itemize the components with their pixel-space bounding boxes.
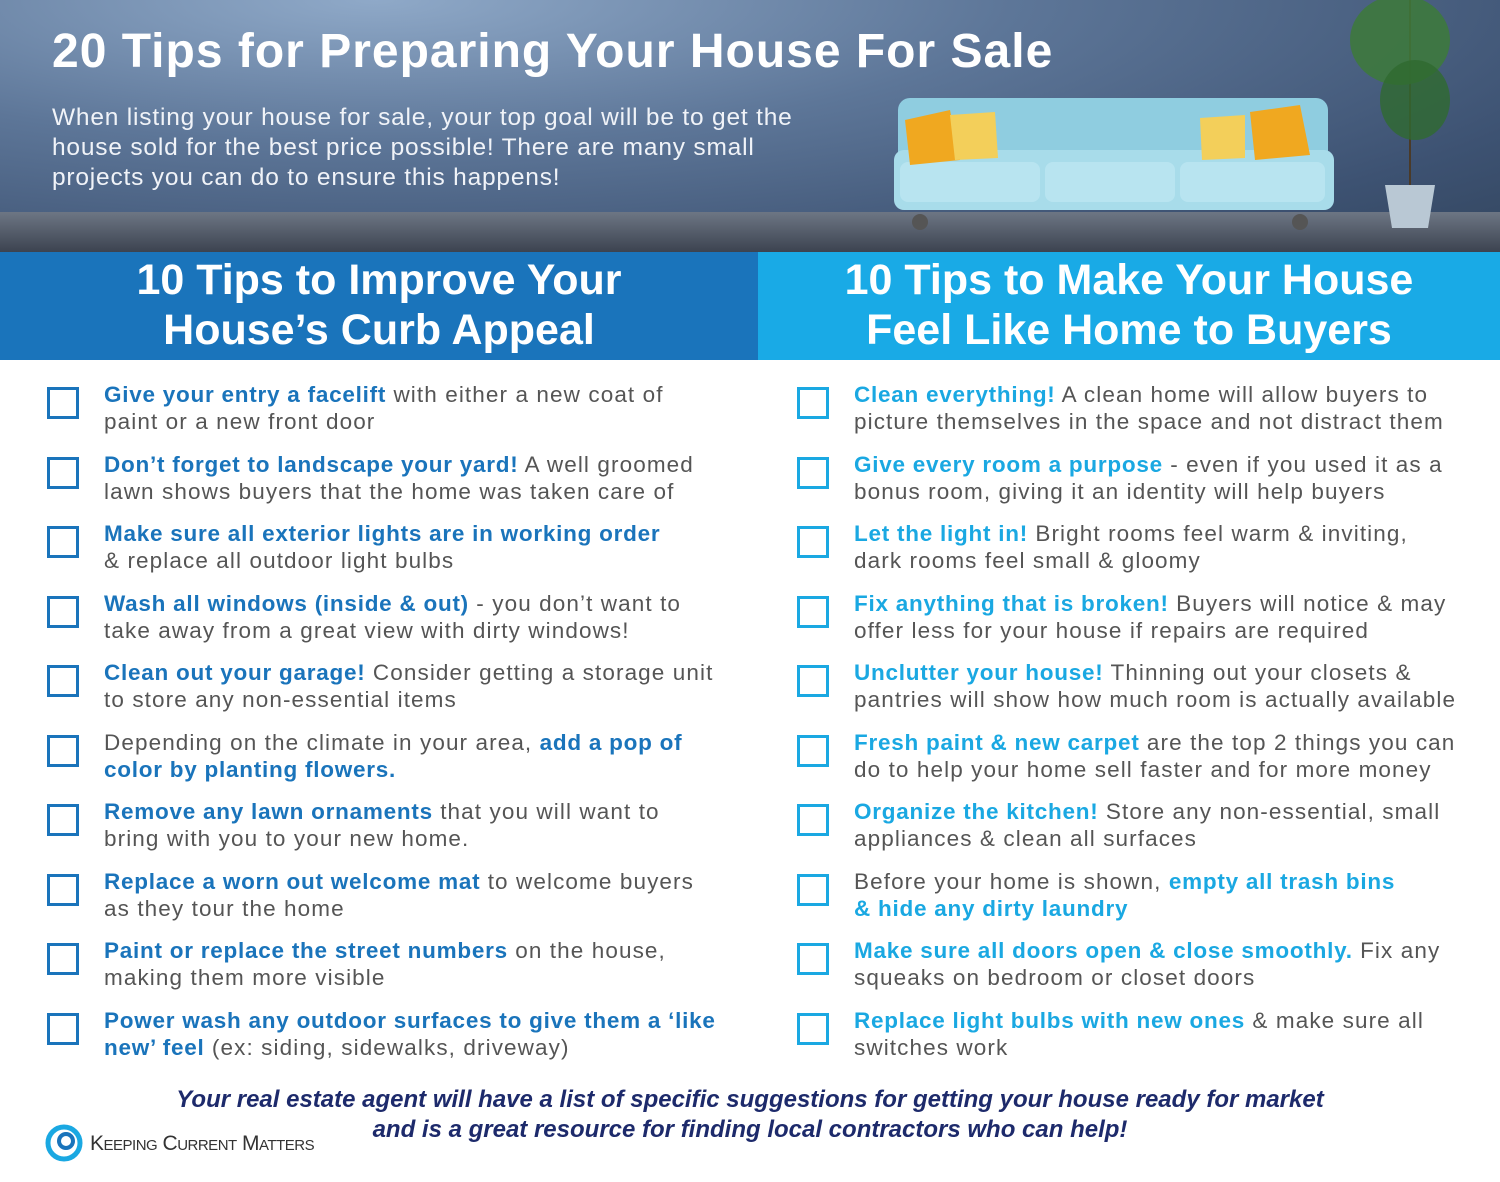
list: curb appeal: paint or a new front door: [104, 409, 375, 434]
item R5: [797, 660, 1456, 712]
heading: feel like home: 10 Tips to Make Your House: [845, 256, 1413, 304]
list: feel like home: Replace light bulbs with new ones & make sure all: [854, 1008, 1424, 1033]
list: curb appeal: lawn shows buyers that the home was taken care of: [104, 479, 674, 504]
list: feel like home: do to help your home sell faster and for more money: [854, 757, 1432, 782]
logo: Keeping Current Matters: [90, 1132, 314, 1155]
item R6: [797, 730, 1455, 782]
list: curb appeal: Remove any lawn ornaments that you will want to: [104, 799, 660, 824]
footer note: [176, 1086, 1325, 1143]
list: feel like home: picture themselves in the space and not distract them: [854, 409, 1444, 434]
list: feel like home: pantries will show how much room is actually available: [854, 687, 1456, 712]
subtitle: When listing your house for sale, your top goal will be to get the: [52, 104, 793, 131]
item L4: [47, 591, 681, 643]
list: curb appeal: Depending on the climate in your area, add a pop of: [104, 730, 682, 755]
list: feel like home: Give every room a purpose - even if you used it as a: [854, 452, 1443, 477]
list: feel like home: offer less for your house if repairs are required: [854, 618, 1369, 643]
heading: feel like home: Feel Like Home to Buyers: [866, 306, 1392, 354]
list: curb appeal: take away from a great view with dirty windows!: [104, 618, 630, 643]
list: feel like home: Clean everything! A clean home will allow buyers to: [854, 382, 1428, 407]
list: curb appeal: as they tour the home: [104, 896, 345, 921]
item L8: [47, 869, 694, 921]
footer note: Your real estate agent will have a list of specific suggestions for getting your house ready for market: [176, 1086, 1324, 1113]
item R10: [797, 1008, 1424, 1060]
list: curb appeal: & replace all outdoor light bulbs: [104, 548, 454, 573]
item L3: [47, 521, 660, 573]
icon: swirl: [46, 1124, 82, 1162]
list: feel like home: bonus room, giving it an identity will help buyers: [854, 479, 1386, 504]
list: curb appeal: color by planting flowers.: [104, 757, 396, 782]
list: curb appeal: Paint or replace the street numbers on the house,: [104, 938, 666, 963]
list: feel like home: dark rooms feel small & gloomy: [854, 548, 1201, 573]
list: curb appeal: Power wash any outdoor surfaces to give them a ‘like: [104, 1008, 716, 1033]
logo: [46, 1124, 314, 1162]
list: curb appeal: new’ feel (ex: siding, sidewalks, driveway): [104, 1035, 570, 1060]
list: feel like home: Before your home is shown, empty all trash bins: [854, 869, 1395, 894]
list: feel like home: Make sure all doors open & close smoothly. Fix any: [854, 938, 1440, 963]
list: feel like home: switches work: [854, 1035, 1008, 1060]
item L7: [47, 799, 660, 851]
list: curb appeal: Replace a worn out welcome mat to welcome buyers: [104, 869, 694, 894]
list: feel like home: squeaks on bedroom or closet doors: [854, 965, 1255, 990]
item R1: [797, 382, 1444, 434]
item R9: [797, 938, 1440, 990]
list: curb appeal: making them more visible: [104, 965, 386, 990]
item R8: [797, 869, 1395, 921]
list: curb appeal: Wash all windows (inside & out) - you don’t want to: [104, 591, 681, 616]
footer note: and is a great resource for finding local contractors who can help!: [373, 1116, 1127, 1143]
heading: curb appeal: House’s Curb Appeal: [163, 306, 595, 354]
item R7: [797, 799, 1440, 851]
list: curb appeal: [47, 382, 716, 1060]
subtitle: [52, 104, 793, 191]
item L5: [47, 660, 713, 712]
sofa illustration: [894, 0, 1450, 230]
item L10: [47, 1008, 716, 1060]
header: [0, 0, 1500, 252]
item R2: [797, 452, 1443, 504]
list: feel like home: appliances & clean all surfaces: [854, 826, 1197, 851]
item L6: [47, 730, 682, 782]
list: feel like home: Fresh paint & new carpet are the top 2 things you can: [854, 730, 1455, 755]
subtitle: projects you can do to ensure this happens!: [52, 164, 560, 191]
item L9: [47, 938, 666, 990]
list: feel like home: Organize the kitchen! Store any non-essential, small: [854, 799, 1440, 824]
list: feel like home: & hide any dirty laundry: [854, 896, 1128, 921]
item R3: [797, 521, 1408, 573]
list: curb appeal: Don’t forget to landscape your yard! A well groomed: [104, 452, 694, 477]
subtitle: house sold for the best price possible! There are many small: [52, 134, 755, 161]
heading: curb appeal: [0, 252, 758, 360]
list: curb appeal: Clean out your garage! Consider getting a storage unit: [104, 660, 713, 685]
title: 20 Tips for Preparing Your House For Sale: [52, 25, 1053, 78]
item R4: [797, 591, 1446, 643]
list: feel like home: Fix anything that is broken! Buyers will notice & may: [854, 591, 1446, 616]
list: curb appeal: bring with you to your new home.: [104, 826, 469, 851]
item L1: [47, 382, 664, 434]
item L2: [47, 452, 694, 504]
list: curb appeal: to store any non-essential items: [104, 687, 457, 712]
list: feel like home: Unclutter your house! Thinning out your closets &: [854, 660, 1412, 685]
list: feel like home: Let the light in! Bright rooms feel warm & inviting,: [854, 521, 1408, 546]
heading: curb appeal: 10 Tips to Improve Your: [136, 256, 622, 304]
list: curb appeal: Make sure all exterior lights are in working order: [104, 521, 660, 546]
heading: feel like home: [758, 252, 1500, 360]
list: curb appeal: Give your entry a facelift with either a new coat of: [104, 382, 664, 407]
